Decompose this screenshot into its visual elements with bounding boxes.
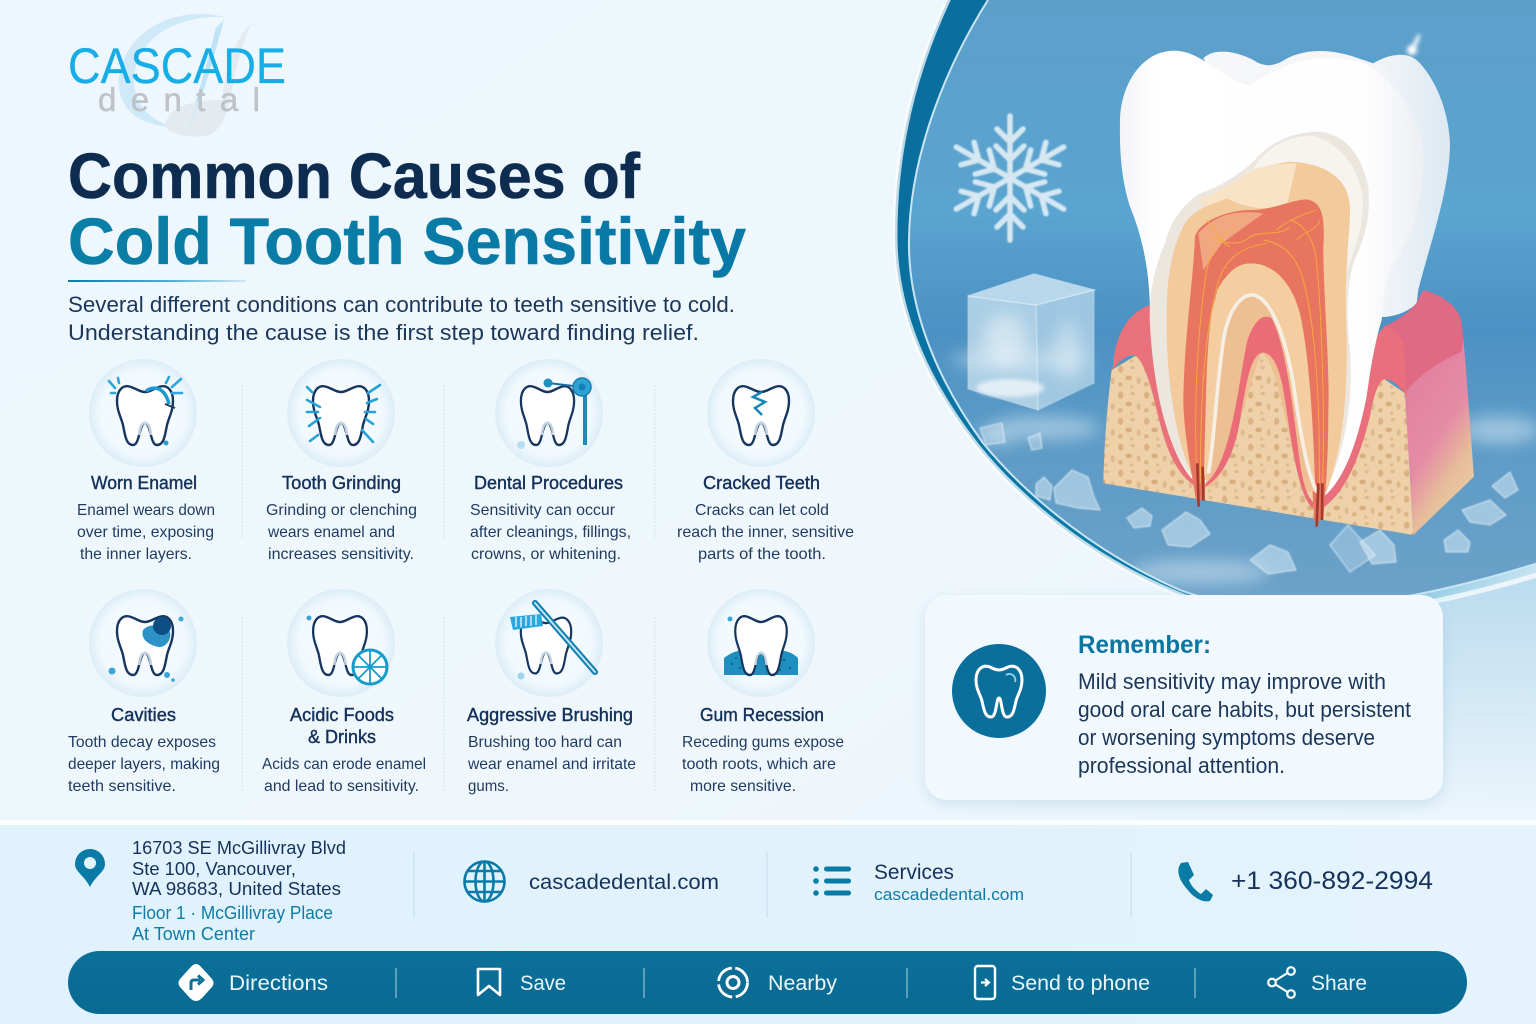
callout: Remember: Remember: xyxy=(1078,631,1211,659)
title underline xyxy=(68,280,246,282)
action: Directions: Directions xyxy=(229,972,328,995)
dentin xyxy=(1167,162,1350,492)
cause: Cavities xyxy=(68,589,220,795)
callout: Remember: professional attention. xyxy=(1078,753,1285,778)
action: Nearby: Nearby xyxy=(768,972,838,995)
cause: Acidic Foods and Drinks: Acids can erode enamel xyxy=(262,756,426,773)
cause: Dental Procedures: after cleanings, fillings, xyxy=(470,524,631,541)
cause: Gum Recession: Gum Recession xyxy=(700,705,824,725)
contact: address: 16703 SE McGillivray Blvd xyxy=(132,838,346,858)
cause: Aggressive Brushing: Aggressive Brushing xyxy=(467,705,633,725)
logo: Cascade Dental xyxy=(68,14,286,136)
cause: Tooth Grinding: Grinding or clenching xyxy=(266,502,417,519)
contact: address: At Town Center xyxy=(132,924,255,944)
cause: Gum Recession: tooth roots, which are xyxy=(682,756,836,773)
contact: address: Ste 100, Vancouver, xyxy=(132,859,296,879)
action: Save: Save xyxy=(520,972,566,995)
cause: Gum Recession: Receding gums expose xyxy=(682,734,844,751)
logo: Cascade Dental: dental xyxy=(98,81,260,118)
action: Save xyxy=(478,969,566,995)
contact: website: cascadedental.com xyxy=(529,871,719,894)
cause: Aggressive Brushing: gums. xyxy=(468,778,509,795)
contact: phone: +1 360-892-2994 xyxy=(1231,867,1433,895)
callout: Remember: or worsening symptoms deserve xyxy=(1078,725,1375,750)
cause: Cavities: Cavities xyxy=(111,705,176,725)
callout: Remember xyxy=(925,595,1443,800)
callout: Remember: Mild sensitivity may improve with xyxy=(1078,669,1386,694)
central bone xyxy=(1205,353,1313,518)
title xyxy=(68,140,746,278)
contact: phone xyxy=(1178,862,1433,901)
cause: Tooth Grinding: Tooth Grinding xyxy=(282,473,401,493)
contact: services: cascadedental.com xyxy=(874,885,1024,904)
ice shards xyxy=(980,423,1518,574)
inner dentin arch xyxy=(1204,263,1315,492)
action: Directions xyxy=(178,964,328,1001)
footer band xyxy=(0,820,1536,1024)
pulp chamber xyxy=(1183,199,1329,522)
bone side face xyxy=(1404,290,1474,535)
icon: phone handset xyxy=(1178,862,1213,901)
contact: services: Services xyxy=(874,861,954,884)
contact: website xyxy=(464,861,719,902)
cause: Dental Procedures: crowns, or whitening. xyxy=(471,546,621,563)
callout: Remember: good oral care habits, but persistent xyxy=(1078,697,1411,722)
nerves and root canals xyxy=(1196,210,1323,487)
action bar xyxy=(68,951,1467,1014)
left gum xyxy=(1112,305,1194,484)
back crown xyxy=(1203,51,1450,317)
cause: Gum Recession xyxy=(682,589,844,795)
cause: Acidic Foods and Drinks: Acidic Foods xyxy=(290,705,394,725)
cause: Gum Recession: more sensitive. xyxy=(690,778,796,795)
icon: map pin xyxy=(75,849,105,887)
tooth model xyxy=(1103,51,1474,535)
floor frost xyxy=(950,350,1536,584)
cause: Cavities: Tooth decay exposes xyxy=(68,734,216,751)
cause: Tooth Grinding: increases sensitivity. xyxy=(268,546,414,563)
contact: address: Floor 1 · McGillivray Place xyxy=(132,903,333,923)
cause: Cavities: deeper layers, making xyxy=(68,756,220,773)
notch white line xyxy=(1208,295,1317,493)
action: Share xyxy=(1268,967,1367,998)
title: Common Causes of xyxy=(68,140,641,212)
cause: Tooth Grinding xyxy=(266,359,417,563)
sparkle xyxy=(1407,33,1422,55)
cause: Acidic Foods and Drinks xyxy=(262,589,426,795)
cause: Worn Enamel: Enamel wears down xyxy=(77,502,215,519)
cause: Aggressive Brushing: wear enamel and irritate xyxy=(467,756,636,773)
soft blue glow right of callout xyxy=(1400,560,1536,822)
cause: Cracked Teeth: Cracks can let cold xyxy=(695,502,829,519)
contact: services xyxy=(813,861,1024,904)
contact: address: WA 98683, United States xyxy=(132,879,341,899)
cause: Cracked Teeth: Cracked Teeth xyxy=(703,473,820,493)
bone front xyxy=(1103,350,1413,535)
intro text: Understanding the cause is the first step toward finding relief. xyxy=(68,320,699,345)
right gum front xyxy=(1323,327,1407,507)
cause: Worn Enamel: Worn Enamel xyxy=(91,473,197,493)
hero photo ring xyxy=(895,0,1536,616)
cause: Aggressive Brushing xyxy=(467,589,636,795)
cause: Dental Procedures xyxy=(470,359,631,563)
cause: Aggressive Brushing: Brushing too hard can xyxy=(468,734,622,751)
central gum xyxy=(1205,317,1314,508)
cause: Worn Enamel: the inner layers. xyxy=(80,546,192,563)
right gum block xyxy=(1383,290,1463,393)
cause: Tooth Grinding: wears enamel and xyxy=(267,524,395,541)
title: Cold Tooth Sensitivity xyxy=(68,204,746,278)
action: Send to phone xyxy=(975,966,1150,999)
cause: Worn Enamel: over time, exposing xyxy=(77,524,214,541)
front crown xyxy=(1120,50,1382,496)
action: Share: Share xyxy=(1311,972,1367,995)
cause: Acidic Foods and Drinks: and lead to sensitivity. xyxy=(264,778,419,795)
intro text: Several different conditions can contribute to teeth sensitive to cold. xyxy=(68,292,735,317)
cause: Cracked Teeth xyxy=(677,359,854,563)
ice cube xyxy=(968,274,1094,410)
enamel section xyxy=(1150,132,1369,495)
cause: Worn Enamel xyxy=(77,359,215,563)
cause: Cracked Teeth: reach the inner, sensitive xyxy=(677,524,854,541)
notch interior xyxy=(1205,296,1314,492)
logo: Cascade Dental: CASCADE xyxy=(68,38,286,94)
cause: Cracked Teeth: parts of the tooth. xyxy=(698,546,826,563)
intro text xyxy=(68,292,735,345)
hero illustration: cross-section tooth with ice xyxy=(880,0,1536,630)
icon: tooth in circle xyxy=(952,644,1046,738)
action: Nearby xyxy=(718,968,838,997)
cause: Cavities: teeth sensitive. xyxy=(68,778,176,795)
action: Send to phone: Send to phone xyxy=(1011,972,1150,995)
cause: Dental Procedures: Sensitivity can occur xyxy=(470,502,616,519)
icon: globe xyxy=(464,861,504,902)
cause: Acidic Foods and Drinks: & Drinks xyxy=(308,727,376,747)
icon: list xyxy=(813,866,851,896)
contact: address xyxy=(75,838,346,944)
cause: Dental Procedures: Dental Procedures xyxy=(474,473,623,493)
snowflake xyxy=(949,116,1071,240)
